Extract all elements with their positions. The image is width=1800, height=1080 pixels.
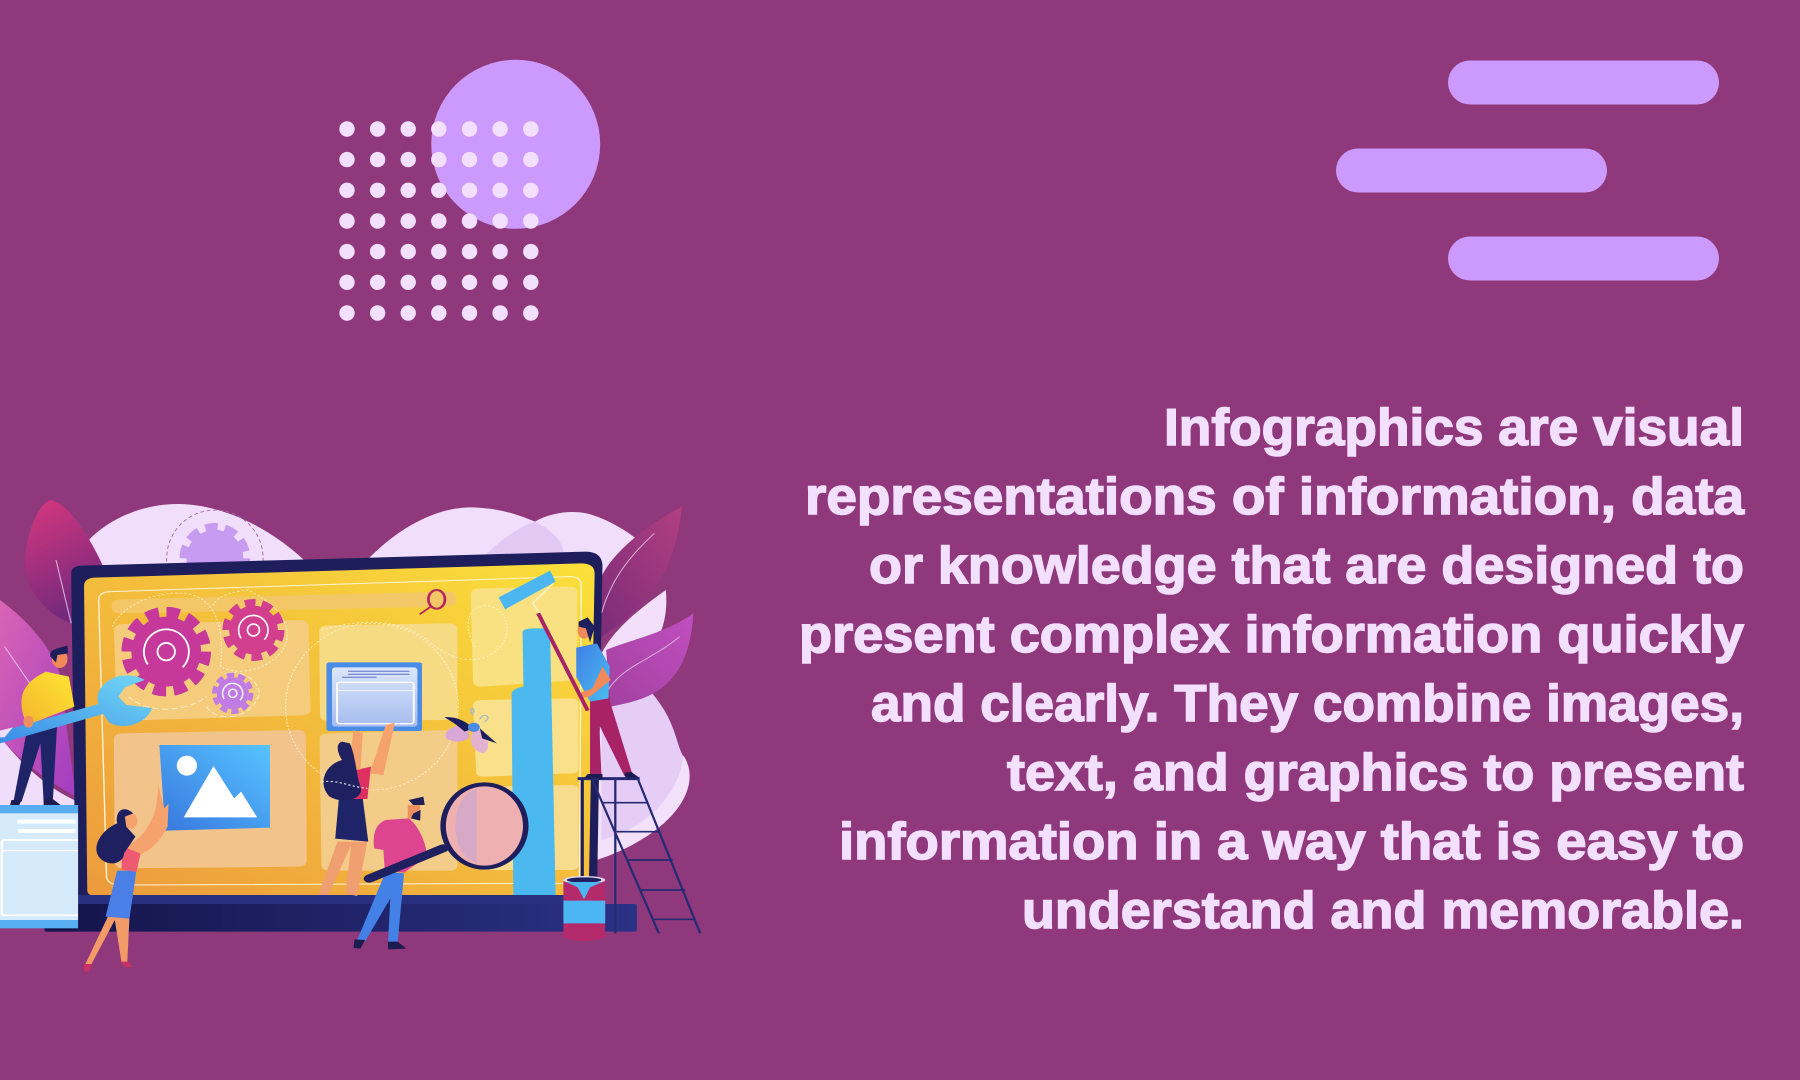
man with paint roller — [499, 571, 639, 778]
search icon — [420, 590, 445, 614]
paint roller — [499, 571, 556, 609]
ladder — [578, 779, 700, 933]
magnifying glass lens — [443, 784, 526, 868]
dashed connector lines — [112, 590, 507, 790]
leaves — [0, 500, 693, 797]
decorative pill bars — [1336, 60, 1719, 280]
laptop screen — [84, 563, 595, 895]
image card — [159, 745, 270, 831]
wrench — [0, 675, 152, 743]
man with magnifying glass — [354, 784, 526, 949]
body text: or knowledge that are designed to — [869, 537, 1744, 595]
head — [52, 650, 67, 668]
laptop frame — [71, 552, 602, 905]
body text: and clearly. They combine images, — [871, 675, 1744, 733]
mountain — [184, 766, 257, 817]
body text: representations of information, data — [805, 468, 1745, 526]
body text: information in a way that is easy to — [839, 813, 1744, 871]
hand — [23, 716, 34, 728]
body text: text, and graphics to present — [1007, 744, 1744, 802]
lilac circle — [431, 60, 600, 229]
gear: medium — [226, 603, 281, 657]
butterfly — [444, 709, 497, 753]
moon — [177, 756, 197, 776]
gear: large — [127, 613, 205, 691]
screen layout panels — [112, 587, 579, 871]
woman holding browser window — [318, 723, 395, 896]
decorative circle with dot grid — [339, 60, 600, 321]
browser window card — [326, 662, 422, 731]
background blobs — [0, 504, 690, 860]
body text: understand and memorable. — [1022, 882, 1744, 940]
body text: present complex information quickly — [799, 606, 1744, 664]
dot grid — [339, 121, 538, 321]
body text: Infographics are visual — [1164, 399, 1744, 457]
blue tower — [512, 628, 556, 895]
sweater — [21, 672, 74, 725]
laptop base — [45, 895, 637, 932]
browser window at left — [0, 805, 78, 928]
gear behind the screen — [167, 510, 263, 607]
hair — [50, 646, 68, 663]
paint can — [563, 876, 605, 941]
legs — [14, 720, 57, 802]
woman holding image card — [84, 786, 169, 971]
man with wrench — [0, 646, 152, 805]
shoes — [10, 798, 61, 805]
illustration: people building a web page on a laptop — [0, 500, 700, 971]
gear: small — [214, 675, 251, 712]
body text — [799, 399, 1745, 940]
white screen outline — [99, 577, 581, 885]
